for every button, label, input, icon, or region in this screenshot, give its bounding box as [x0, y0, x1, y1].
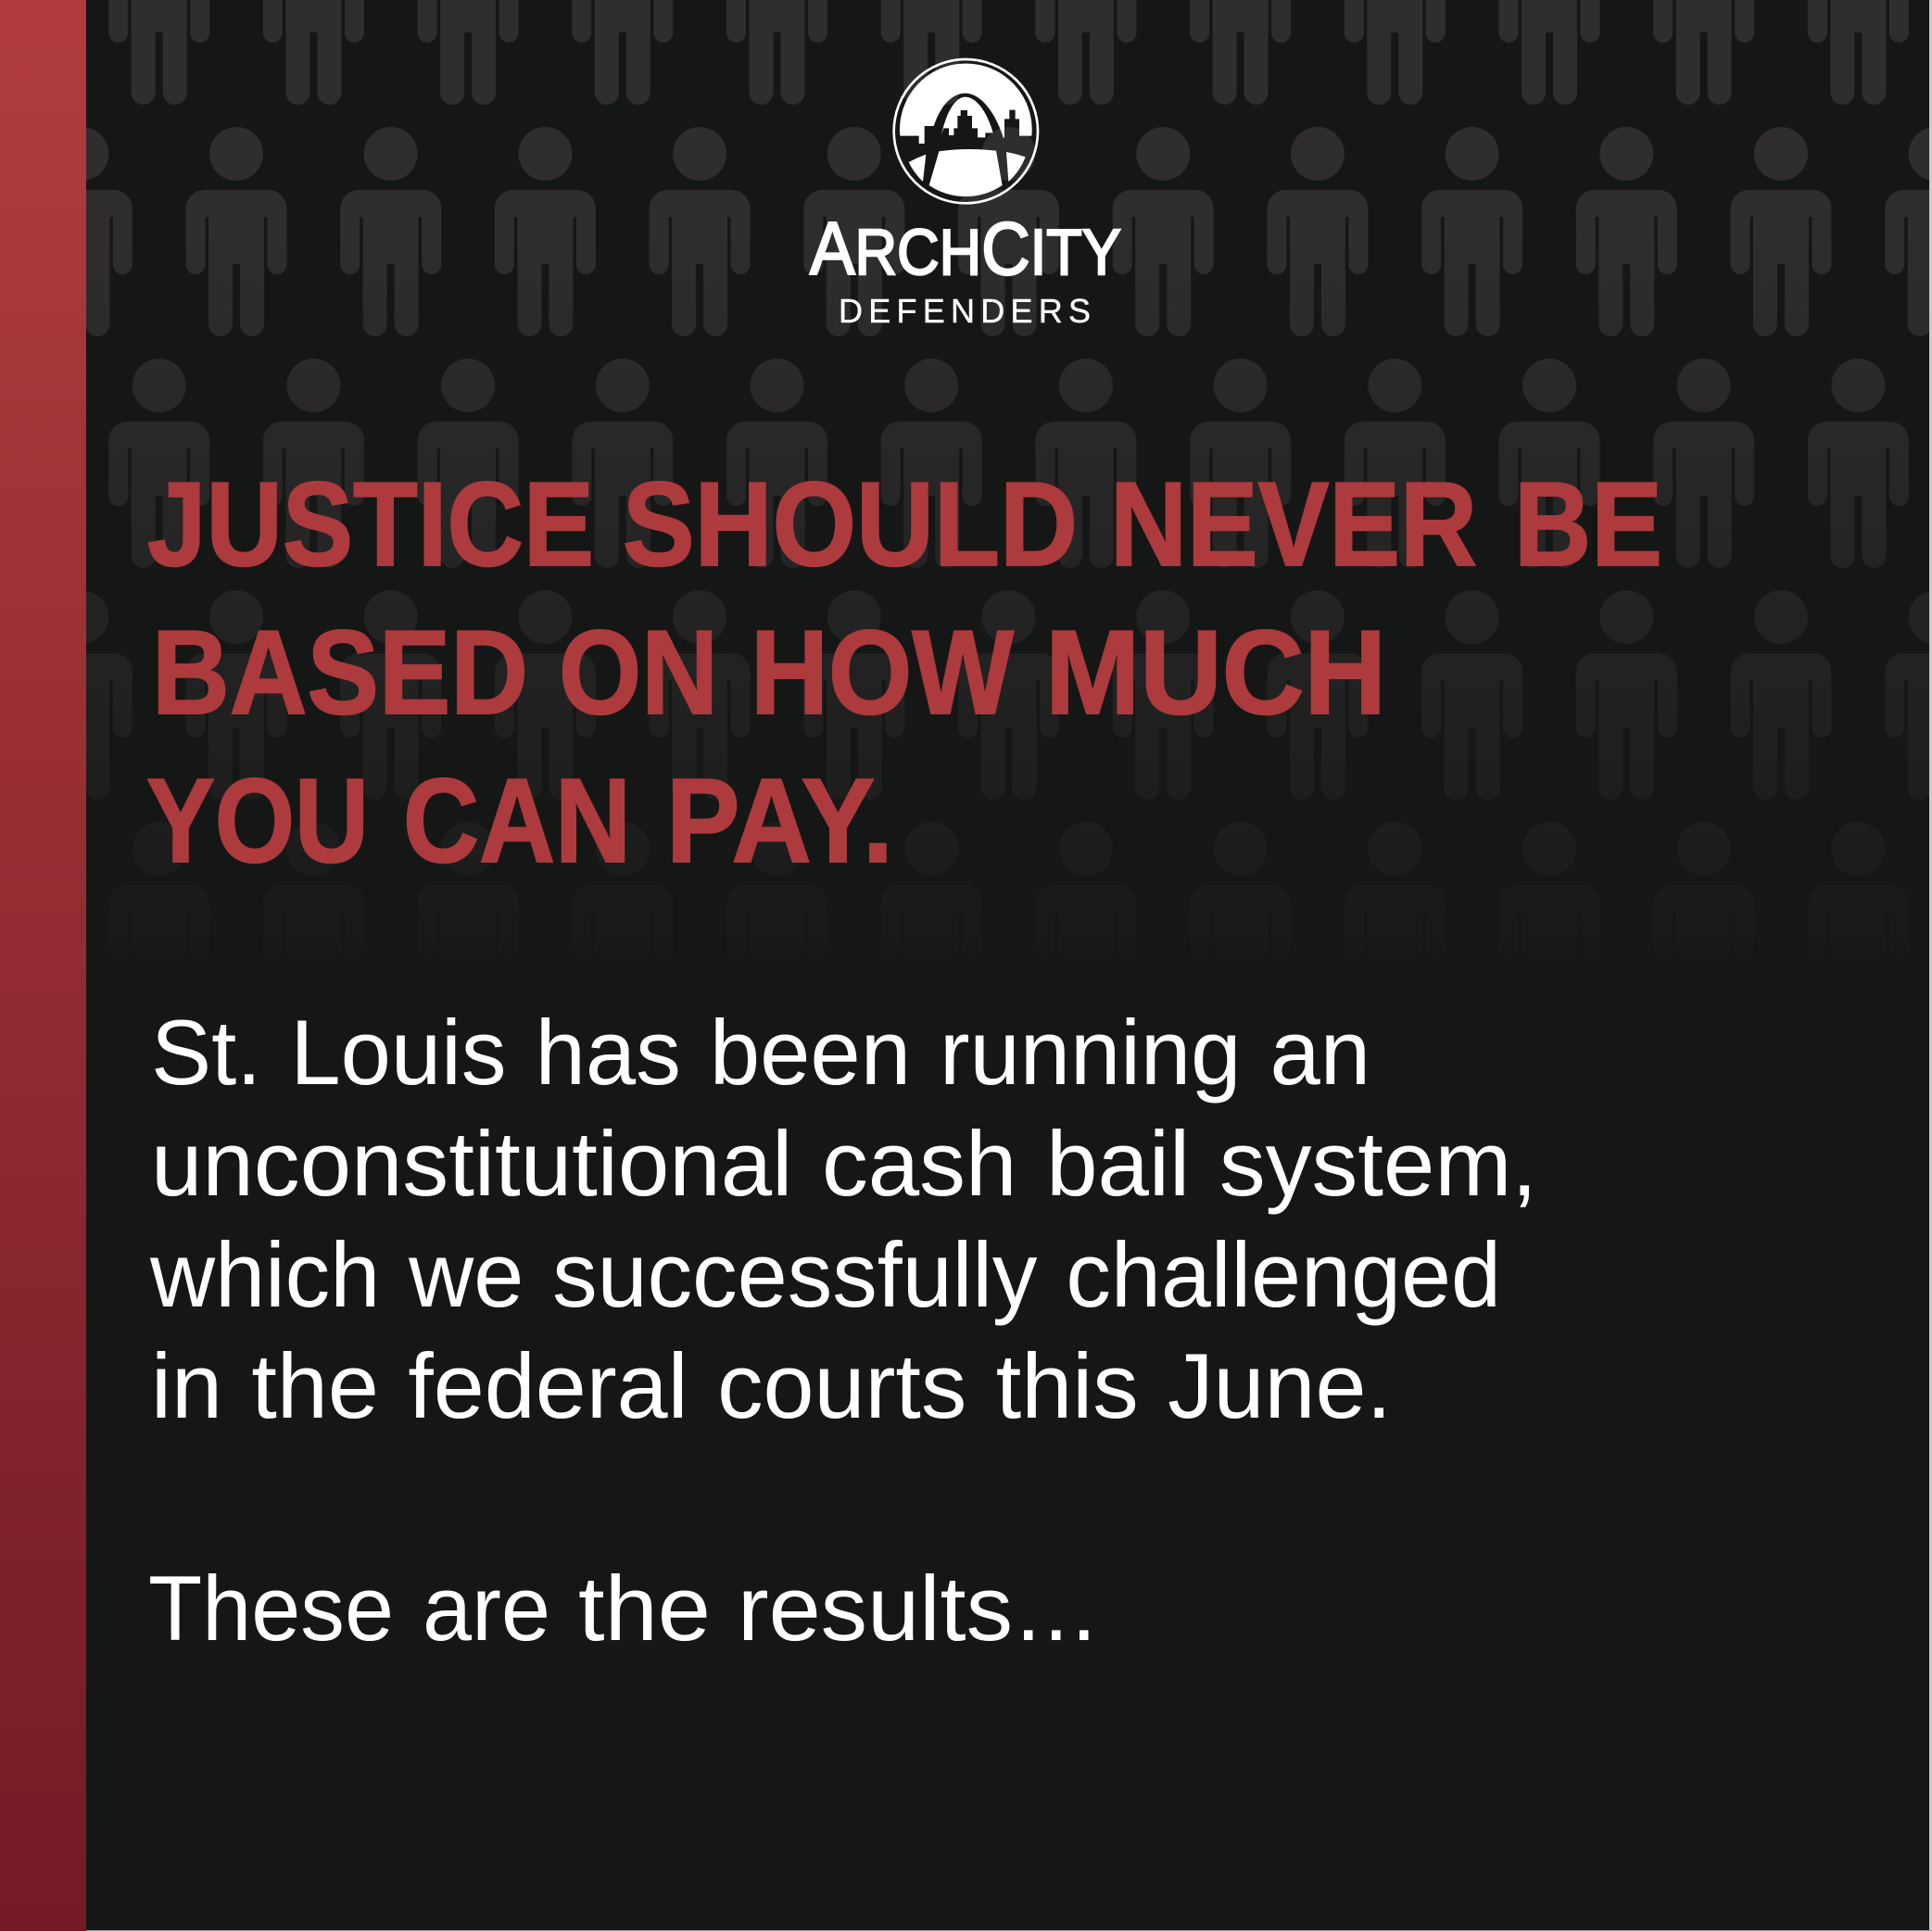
icon: arch and skyline emblem — [894, 59, 1038, 203]
logo: ArchCity Defenders — [810, 59, 1121, 330]
closing line: ... — [1016, 1557, 1099, 1660]
headline: PAY. — [666, 754, 893, 888]
headline: MUCH — [1045, 606, 1386, 739]
closing line: the — [578, 1557, 711, 1660]
headline: HOW — [751, 606, 1014, 739]
closing line: are — [423, 1557, 550, 1660]
headline: BASED — [152, 606, 528, 739]
background pattern: rows of human figures — [86, 0, 1929, 827]
closing line: These — [148, 1557, 394, 1660]
body paragraph: in the federal courts this June. — [151, 1334, 1392, 1437]
headline: ON — [559, 606, 718, 739]
headline: SHOULD — [623, 458, 1078, 591]
headline: JUSTICE — [147, 458, 594, 591]
logo wordmark: ArchCity: ARCHCITY — [810, 207, 1121, 291]
body paragraph: which we successfully challenged — [149, 1223, 1501, 1326]
body paragraph: St. Louis has been running an — [151, 1001, 1370, 1104]
headline: NEVER — [1110, 458, 1477, 591]
headline: BE — [1514, 458, 1662, 591]
headline: CAN — [403, 754, 631, 888]
headline — [146, 458, 1662, 888]
closing line: results — [738, 1557, 1013, 1660]
headline: YOU — [146, 754, 369, 888]
body paragraph — [149, 1001, 1537, 1437]
body paragraph: unconstitutional cash bail system, — [151, 1112, 1537, 1215]
left red gradient bar — [0, 0, 86, 1931]
logo wordmark: Defenders: DEFENDERS — [839, 292, 1091, 330]
